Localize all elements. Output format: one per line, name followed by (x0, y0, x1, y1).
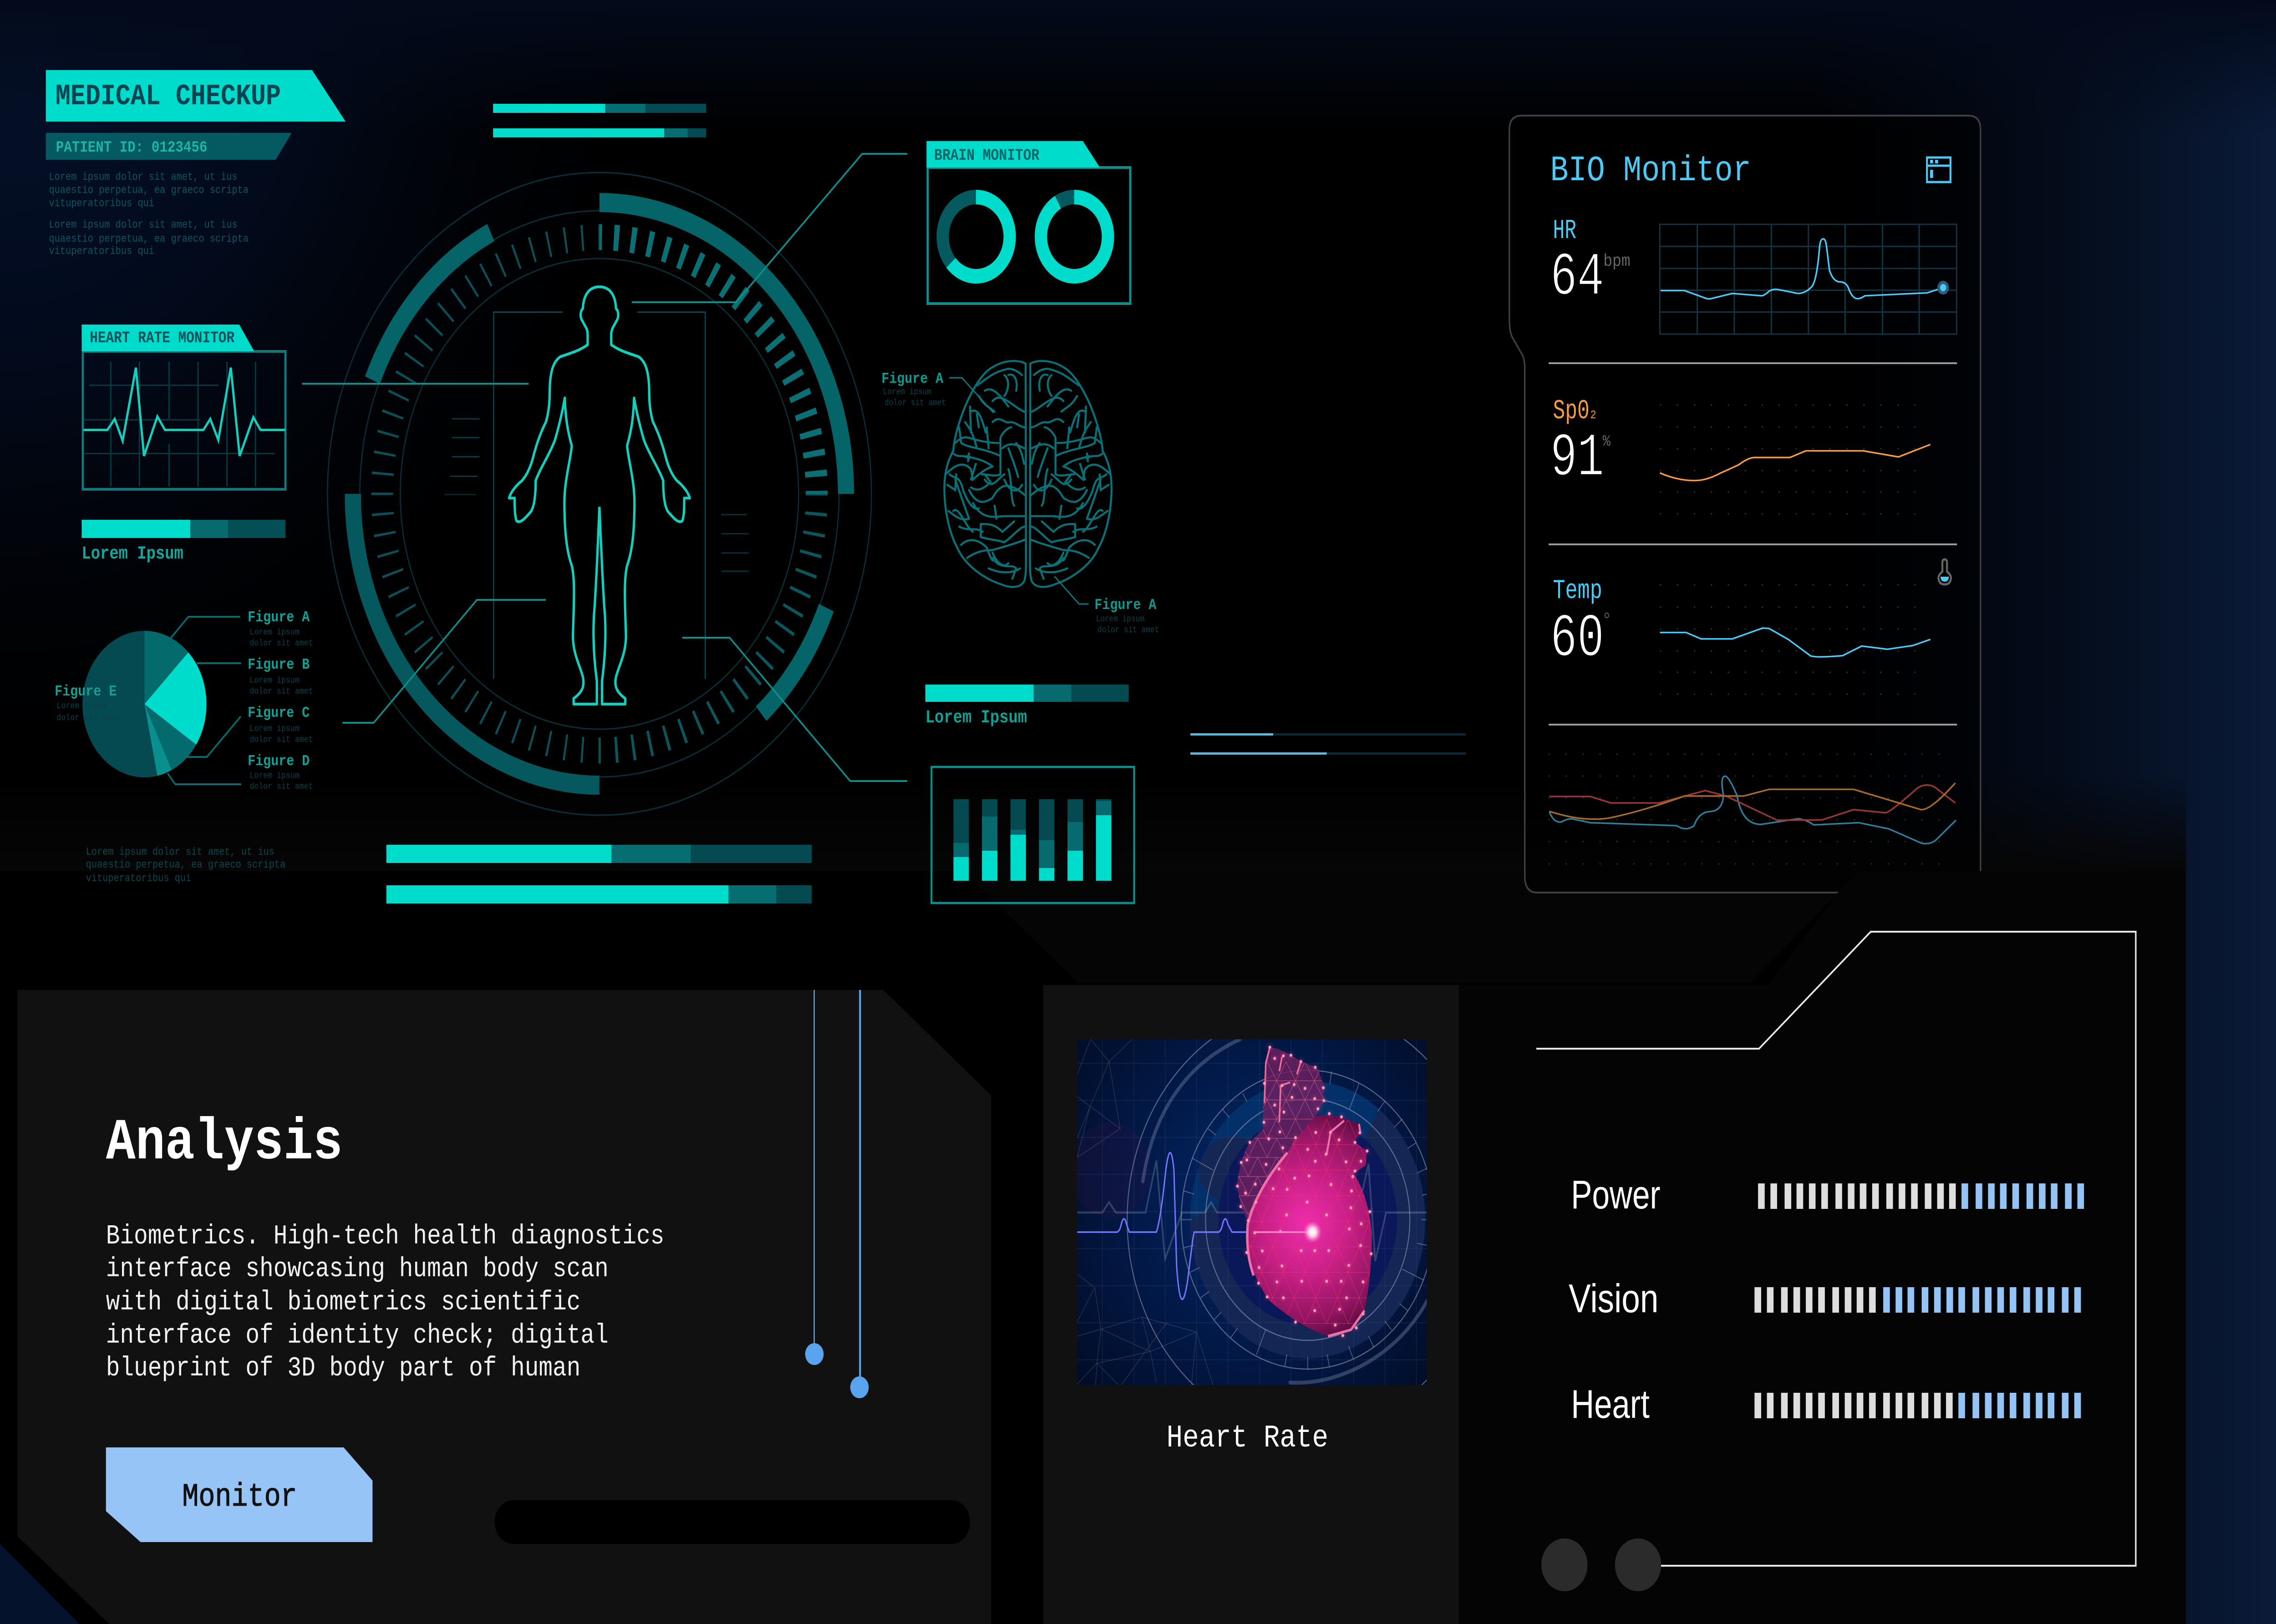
intro lorem text: quaestio perpetua, ea graeco scripta (49, 232, 249, 245)
panel: vitals meters (1459, 871, 2186, 1624)
bottom progress bars (386, 845, 812, 903)
heart illustration (1077, 1039, 1427, 1385)
analysis heading: Analysis (106, 1110, 343, 1176)
stacked bar chart (931, 767, 1134, 903)
panel: heart rate monitor (81, 325, 285, 489)
metric: oxygen saturation: % (1603, 433, 1610, 451)
brain callout labels: Lorem ipsum (1096, 614, 1144, 624)
heart: mesh nodes (1237, 1047, 1371, 1335)
chart marker (1937, 281, 1949, 294)
pie chart labels: Figure A (248, 609, 310, 626)
human body outline (509, 287, 690, 704)
pie chart labels: dolor sit amet (249, 782, 313, 792)
metric: temperature (1550, 575, 1609, 674)
metric: heart rate: bpm (1603, 252, 1631, 271)
chart: oxygen line (1660, 405, 1931, 514)
bio monitor heading: BIO Monitor (1550, 150, 1751, 191)
analysis body text: blueprint of 3D body part of human (106, 1352, 580, 1384)
brain callout labels: dolor sit amet (1097, 625, 1159, 635)
pie chart labels: dolor sit amet (56, 713, 120, 723)
body scan radial gauge (327, 173, 871, 815)
pie chart labels: dolor sit amet (249, 639, 313, 648)
panel: heart rate (1043, 985, 1459, 1624)
button: monitor: Monitor (182, 1479, 297, 1516)
lower lorem text (86, 845, 285, 885)
pie chart labels: Lorem ipsum (56, 701, 107, 711)
intro lorem text (49, 170, 249, 258)
brain callout labels (881, 370, 1159, 635)
top progress bars (493, 104, 706, 137)
left progress bar with label: Lorem Ipsum (81, 544, 183, 564)
lower lorem text: vituperatoribus qui (86, 872, 191, 885)
patient id bar (46, 133, 292, 160)
icon: window (1927, 157, 1951, 182)
pie chart labels: Lorem ipsum (249, 628, 300, 637)
icon: thermometer (1938, 559, 1951, 584)
metric: heart rate: HR (1553, 215, 1576, 246)
panel: brain monitor donuts (926, 141, 1130, 304)
black pill bar (495, 1500, 970, 1544)
pie chart labels: Figure E (55, 683, 117, 700)
brain callout labels: dolor sit amet (884, 398, 946, 408)
pie chart labels: Lorem ipsum (249, 724, 300, 734)
metric: oxygen saturation: Sp0 (1553, 396, 1590, 426)
metric: temperature: 60 (1550, 604, 1604, 674)
intro lorem text: vituperatoribus qui (49, 244, 154, 258)
pie chart labels: Lorem ipsum (249, 676, 300, 685)
panel: bio monitor (1509, 116, 1981, 893)
panel: brain monitor donuts: BRAIN MONITOR (934, 147, 1040, 165)
title banner: medical checkup: MEDICAL CHECKUP (56, 80, 281, 114)
pie chart labels (55, 609, 313, 792)
intro lorem text: vituperatoribus qui (49, 197, 154, 210)
pie chart labels: Figure D (248, 753, 310, 770)
scan brackets and scale ticks (445, 312, 749, 679)
pie chart labels: dolor sit amet (249, 735, 313, 745)
brain callout labels: Figure A (881, 370, 944, 388)
meter: power (1571, 1172, 2084, 1217)
heart: ventricle (1240, 1115, 1381, 1336)
analysis body text: with digital biometrics scientific (106, 1286, 580, 1318)
analysis body text: interface of identity check; digital (106, 1320, 609, 1351)
right progress bar with label: Lorem Ipsum (925, 708, 1027, 728)
meter: heart: Heart (1571, 1382, 1650, 1426)
metric: heart rate: 64 (1550, 243, 1604, 313)
callout connector lines (302, 154, 907, 781)
title banner: medical checkup (46, 70, 345, 122)
metric: temperature: Temp (1553, 575, 1602, 606)
pie chart labels: Figure C (248, 705, 310, 722)
left progress bar with label (81, 520, 285, 564)
brain illustration (945, 361, 1112, 587)
button: monitor (106, 1447, 372, 1542)
decorative round buttons (1541, 1538, 1661, 1591)
intro lorem text: quaestio perpetua, ea graeco scripta (49, 183, 249, 197)
intro lorem text: Lorem ipsum dolor sit amet, ut ius (49, 170, 238, 183)
intro lorem text: Lorem ipsum dolor sit amet, ut ius (49, 218, 238, 231)
bio monitor dividers (1549, 362, 1957, 726)
blue status lines (1190, 733, 1466, 755)
panel: heart rate monitor: HEART RATE MONITOR (90, 329, 235, 347)
brain callout labels: Figure A (1094, 597, 1157, 614)
right progress bar with label (925, 685, 1129, 728)
metric: oxygen saturation: 91 (1550, 424, 1604, 493)
chart: heart rate line (1660, 224, 1956, 334)
brain callout labels: Lorem ipsum (883, 387, 931, 397)
lower lorem text: quaestio perpetua, ea graeco scripta (86, 858, 285, 871)
analysis body text: Biometrics. High-tech health diagnostics (106, 1220, 664, 1252)
pie chart labels: dolor sit amet (249, 687, 313, 696)
lower lorem text: Lorem ipsum dolor sit amet, ut ius (86, 845, 274, 858)
pie chart labels: Figure B (248, 656, 310, 674)
meter: vision (1569, 1276, 2081, 1321)
panel: analysis (17, 990, 991, 1624)
meter: heart (1571, 1382, 2081, 1426)
metric: oxygen saturation (1550, 396, 1610, 493)
pie chart (82, 617, 241, 784)
analysis body text (106, 1220, 664, 1384)
heart rate caption: Heart Rate (1167, 1421, 1328, 1457)
chart: combined trends (1549, 754, 1956, 864)
patient id bar: PATIENT ID: 0123456 (56, 138, 207, 157)
chart: temperature line (1660, 585, 1931, 694)
meter: power: Power (1571, 1172, 1661, 1217)
decorative pins (805, 990, 869, 1398)
pie chart labels: Lorem ipsum (249, 771, 300, 781)
metric: heart rate (1550, 215, 1631, 313)
analysis body text: interface showcasing human body scan (106, 1253, 609, 1284)
heart: upper vessels (1237, 1048, 1324, 1220)
metric: oxygen saturation: 2 (1590, 409, 1596, 422)
meter: vision: Vision (1569, 1276, 1658, 1321)
